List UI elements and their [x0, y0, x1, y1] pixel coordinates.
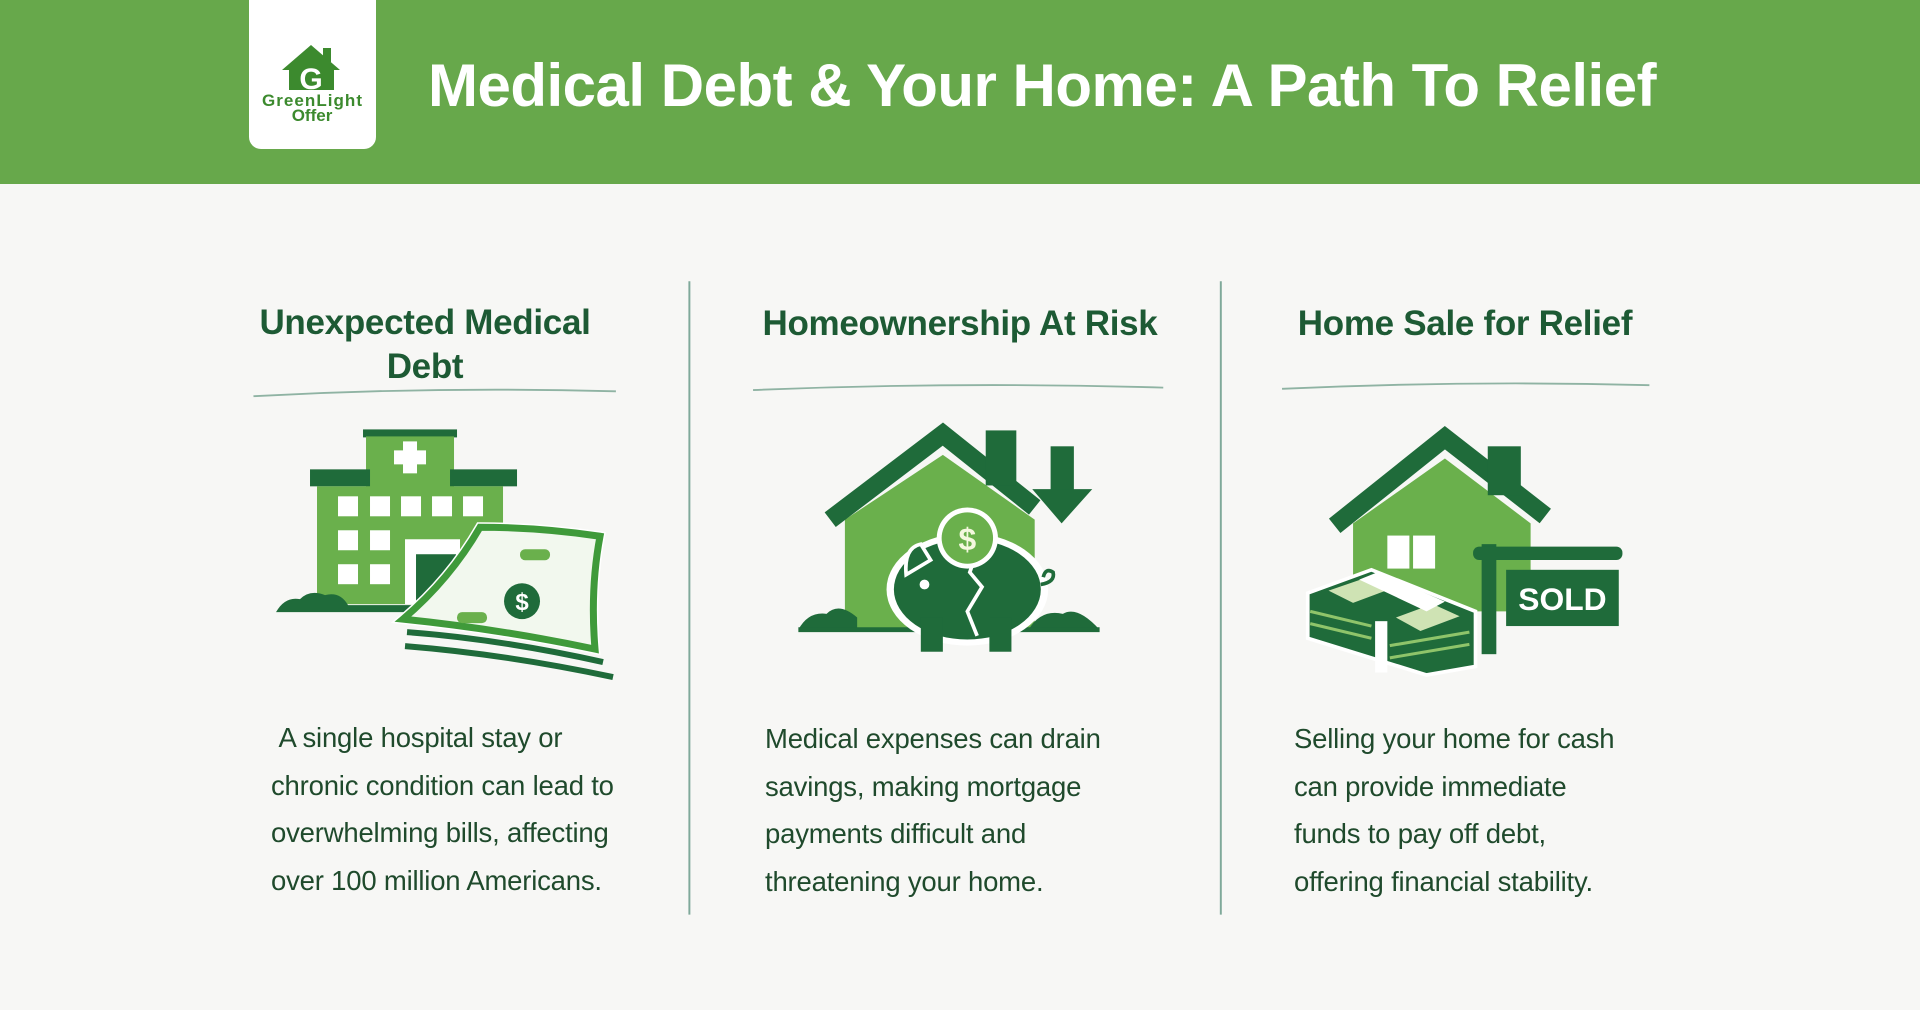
- icon: house with broken piggy bank: $: [958, 521, 977, 557]
- title: Medical Debt & Your Home: A Path To Relief: [428, 52, 1656, 119]
- text block: can provide immediate: [1294, 770, 1566, 802]
- text block: chronic condition can lead to: [271, 770, 614, 800]
- icon: house sold with cash: SOLD: [1518, 581, 1607, 617]
- heading: Debt: [387, 347, 463, 386]
- text block: A single hospital stay or: [278, 722, 562, 753]
- icon: house with broken piggy bank: [798, 430, 1100, 652]
- text block: funds to pay off debt,: [1294, 818, 1546, 849]
- text block: offering financial stability.: [1294, 866, 1593, 896]
- text block: Medical expenses can drain: [765, 723, 1101, 754]
- text block: [765, 723, 1101, 897]
- heading: Home Sale for Relief: [1298, 304, 1632, 343]
- panel: homeownership at risk: [762, 304, 1158, 897]
- heading: Homeownership At Risk: [762, 304, 1157, 343]
- icon: house sold with cash: [1308, 438, 1622, 675]
- logo: [249, 0, 376, 149]
- heading: [259, 303, 591, 386]
- icon: hospital and money: $: [515, 589, 529, 616]
- text block: [1294, 723, 1614, 897]
- text block: over 100 million Americans.: [271, 864, 602, 896]
- text block: overwhelming bills, affecting: [271, 817, 609, 848]
- text block: [271, 722, 614, 896]
- logo: G: [299, 63, 323, 96]
- panel: unexpected medical debt: [259, 303, 614, 896]
- text block: payments difficult and: [765, 818, 1026, 849]
- logo: Offer: [292, 106, 333, 125]
- header band: [0, 0, 1920, 184]
- panel: home sale for relief: [1294, 304, 1633, 897]
- heading: Unexpected Medical: [259, 303, 591, 342]
- text block: threatening your home.: [765, 866, 1043, 896]
- text block: Selling your home for cash: [1294, 723, 1614, 754]
- text block: savings, making mortgage: [765, 770, 1081, 802]
- logo: GreenLight: [262, 91, 362, 110]
- icon: hospital and money: [276, 429, 613, 677]
